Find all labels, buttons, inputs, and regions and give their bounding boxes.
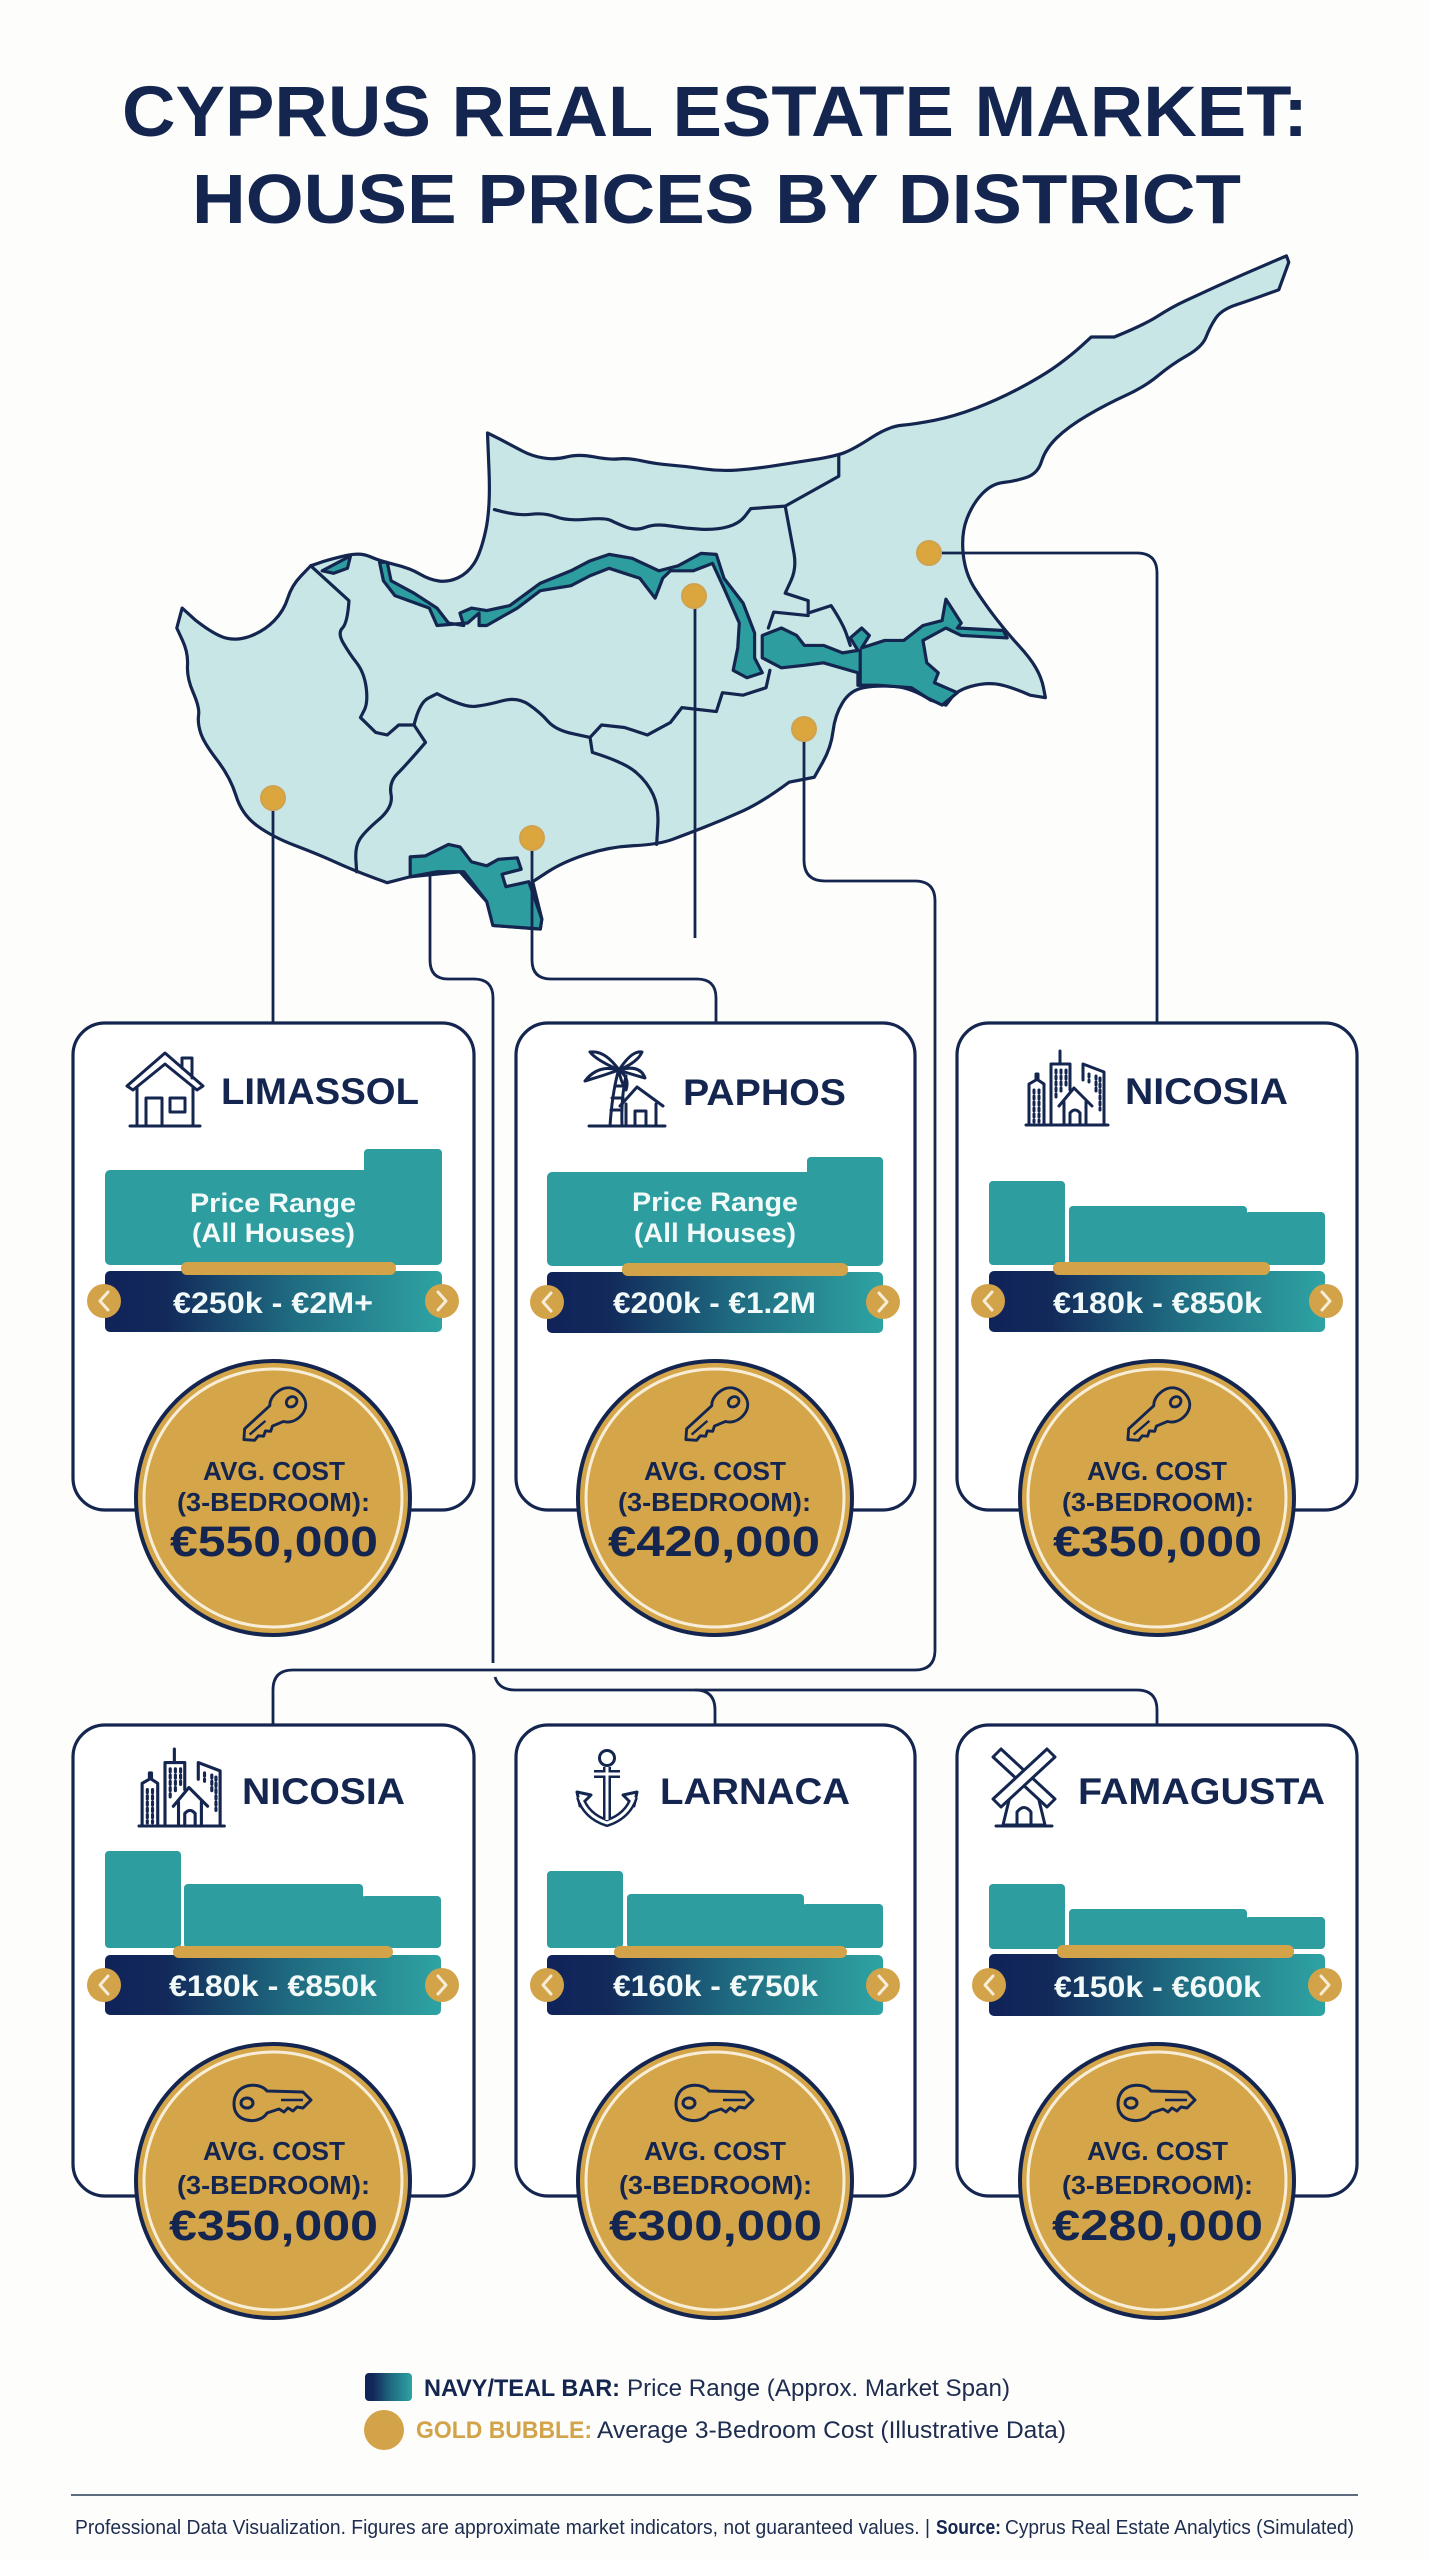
map of Cyprus (177, 256, 1289, 929)
right chevron (866, 1968, 900, 2002)
average cost text: (3-BEDROOM): (177, 2172, 370, 2200)
footer note: Professional Data Visualization. Figures are approximate market indicators, not guaranteed values. | (75, 2516, 930, 2539)
icon: house (127, 1053, 203, 1126)
average cost text: (3-BEDROOM): (1062, 2172, 1253, 2200)
legend: gold bubble: Average 3-Bedroom Cost (Illustrative Data) (597, 2417, 1066, 2444)
map location pins (261, 541, 941, 850)
icon: key (1119, 1381, 1196, 1454)
icon: city buildings and house (139, 1749, 224, 1826)
gold span marker (173, 1946, 393, 1958)
bar caption (190, 1188, 356, 1248)
Limassol heading: LIMASSOL (221, 1071, 419, 1112)
gold span marker (622, 1263, 848, 1276)
gold bubble: average cost (136, 1361, 410, 1635)
Nicosia teal bars (989, 1181, 1325, 1265)
right chevron (425, 1968, 459, 2002)
left chevron (530, 1285, 564, 1319)
price range bar (547, 1272, 883, 1333)
legend: navy/teal bar: NAVY/TEAL BAR: (424, 2375, 620, 2402)
card: Limassol (73, 1023, 474, 1635)
Nicosia heading: NICOSIA (242, 1771, 405, 1812)
icon: palm tree and house (585, 1052, 665, 1126)
card: Famagusta (957, 1725, 1357, 2318)
legend (364, 2373, 1066, 2450)
average cost text: (3-BEDROOM): (619, 2172, 812, 2200)
gold span marker (1057, 1945, 1294, 1958)
average cost text (1053, 1458, 1262, 1566)
icon: key (676, 2085, 753, 2121)
price range value: €250k - €2M+ (173, 1287, 373, 1320)
connector lines (273, 553, 1157, 1725)
right chevron (1308, 1968, 1342, 2002)
left chevron (972, 1968, 1006, 2002)
average cost text: AVG. COST (203, 2138, 345, 2166)
right chevron (1309, 1284, 1343, 1318)
average cost text: €420,000 (608, 1518, 820, 1566)
average cost text (609, 2138, 822, 2250)
price range value: €160k - €750k (613, 1970, 818, 2003)
icon: key (1118, 2085, 1195, 2121)
price range bar (105, 1955, 441, 2015)
card: Larnaca (516, 1725, 915, 2318)
price range value: €150k - €600k (1054, 1971, 1261, 2004)
average cost text: (3-BEDROOM): (177, 1489, 370, 1517)
price range value: €180k - €850k (1053, 1287, 1262, 1320)
icon: city buildings and house (1026, 1051, 1108, 1125)
gold bubble: average cost (1020, 1361, 1294, 1635)
left chevron (87, 1284, 121, 1318)
bar caption (632, 1187, 798, 1248)
salt lakes and teal strips (322, 553, 1007, 929)
card: Nicosia (bottom row) (73, 1725, 474, 2318)
legend: gold bubble: GOLD BUBBLE: (416, 2417, 592, 2444)
Nicosia card frame (73, 1725, 474, 2196)
Limassol card frame (73, 1023, 474, 1510)
footer source: Cyprus Real Estate Analytics (Simulated) (1005, 2516, 1354, 2539)
Famagusta card frame (957, 1725, 1357, 2196)
title: HOUSE PRICES BY DISTRICT (192, 160, 1241, 238)
left chevron (530, 1968, 564, 2002)
title: CYPRUS REAL ESTATE MARKET: (122, 73, 1308, 152)
gold bubble: average cost (1020, 2044, 1294, 2318)
price range value: €180k - €850k (169, 1970, 377, 2003)
gold span marker (1053, 1262, 1270, 1275)
bar caption: (All Houses) (192, 1218, 355, 1248)
gold bubble: average cost (578, 1361, 852, 1635)
Famagusta teal bars (989, 1884, 1325, 1949)
Limassol teal bars (105, 1149, 442, 1265)
icon: windmill (993, 1749, 1055, 1826)
left chevron (971, 1284, 1005, 1318)
district borders (311, 456, 860, 872)
icon: key (235, 1381, 312, 1454)
icon: key (234, 2085, 311, 2121)
gold span marker (614, 1946, 847, 1958)
average cost text: €550,000 (170, 1518, 378, 1566)
average cost text: €300,000 (609, 2202, 822, 2250)
bar caption: Price Range (190, 1188, 356, 1218)
legend: gold bubble (364, 2410, 1066, 2450)
average cost text: AVG. COST (1087, 2138, 1228, 2166)
Paphos teal bars (547, 1157, 883, 1266)
footer source label: Source: (936, 2516, 1001, 2539)
card: Nicosia (top row) (957, 1023, 1357, 1635)
Paphos heading: PAPHOS (683, 1072, 846, 1113)
Famagusta heading: FAMAGUSTA (1078, 1771, 1325, 1812)
average cost text (608, 1458, 820, 1566)
right chevron (425, 1284, 459, 1318)
average cost text: (3-BEDROOM): (1062, 1489, 1254, 1517)
average cost text: (3-BEDROOM): (618, 1489, 811, 1517)
price range bar (105, 1271, 442, 1332)
card: Paphos (516, 1023, 915, 1635)
gold bubble: average cost (578, 2044, 852, 2318)
average cost text (170, 1458, 378, 1566)
footer (71, 2494, 1358, 2539)
Larnaca card frame (516, 1725, 915, 2196)
right chevron (866, 1285, 900, 1319)
bar caption: (All Houses) (634, 1218, 796, 1248)
legend: navy/teal bar (365, 2373, 1010, 2402)
Paphos card frame (516, 1023, 915, 1510)
Larnaca heading: LARNACA (660, 1771, 850, 1812)
Larnaca teal bars (547, 1871, 883, 1948)
Nicosia card frame (957, 1023, 1357, 1510)
average cost text: €280,000 (1052, 2202, 1263, 2250)
Nicosia heading: NICOSIA (1125, 1071, 1288, 1112)
icon: anchor (577, 1750, 637, 1823)
icon: key (677, 1381, 754, 1454)
legend: navy/teal bar: Price Range (Approx. Market Span) (627, 2375, 1010, 2402)
average cost text: AVG. COST (644, 2138, 786, 2166)
left chevron (87, 1968, 121, 2002)
average cost text: €350,000 (169, 2202, 378, 2250)
map outline (177, 256, 1289, 929)
average cost text: AVG. COST (203, 1458, 345, 1486)
average cost text: AVG. COST (1087, 1458, 1227, 1486)
gold span marker (181, 1262, 396, 1275)
average cost text (169, 2138, 378, 2250)
Nicosia teal bars (105, 1851, 441, 1948)
average cost text: €350,000 (1053, 1518, 1262, 1566)
price range bar (989, 1271, 1325, 1332)
price range bar (547, 1955, 883, 2015)
average cost text (1052, 2138, 1263, 2250)
bar caption: Price Range (632, 1187, 798, 1217)
title (122, 73, 1308, 238)
average cost text: AVG. COST (644, 1458, 786, 1486)
price range bar (989, 1954, 1325, 2016)
gold bubble: average cost (136, 2044, 410, 2318)
price range value: €200k - €1.2M (613, 1287, 816, 1320)
